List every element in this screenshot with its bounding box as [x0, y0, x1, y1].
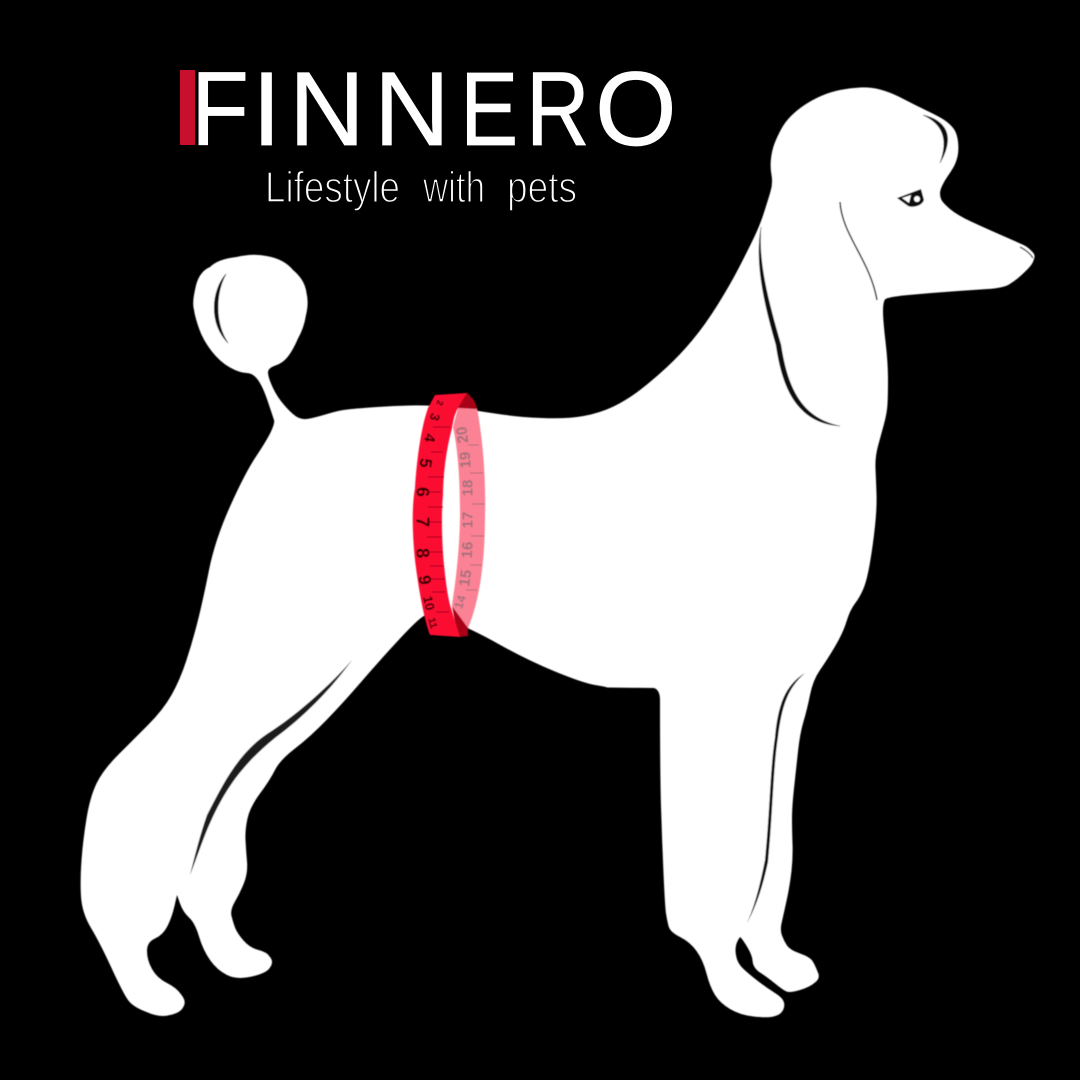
tail crescent line: [214, 274, 228, 343]
rear leg line: [190, 660, 352, 875]
tape back numbers: 19: [457, 451, 475, 469]
tape back ticks: [466, 445, 485, 590]
logo: FINNERO wordmark: N: [289, 51, 365, 168]
tape front numbers: 2: [434, 399, 445, 407]
tagline: Lifestyle: [265, 163, 400, 212]
tape front numbers: [412, 399, 445, 630]
logo: FINNERO wordmark: F: [191, 51, 249, 168]
tape front numbers: 5: [416, 457, 436, 469]
tape front numbers: 7: [413, 517, 433, 527]
poodle silhouette: [81, 87, 1035, 1017]
tape back numbers: 15: [456, 569, 475, 588]
tape back band: [452, 408, 485, 628]
tape front numbers: 9: [414, 574, 435, 586]
tape inner dark ends: [452, 393, 477, 637]
tape front numbers: 6: [413, 487, 433, 497]
measuring tape: [412, 393, 485, 637]
eye: [897, 189, 924, 207]
ear inner line: [840, 202, 877, 300]
tape back numbers: 14: [451, 593, 469, 611]
tape back numbers: [451, 426, 477, 611]
logo: FINNERO wordmark: R: [526, 50, 590, 168]
tape front ticks: [427, 427, 450, 612]
ear outer line: [759, 227, 840, 426]
logo: FINNERO wordmark: E: [460, 51, 518, 168]
logo: FINNERO wordmark: O: [595, 51, 677, 168]
nose line: [1020, 247, 1033, 258]
tape front numbers: 4: [420, 432, 438, 444]
tape back numbers: 16: [459, 541, 477, 559]
tape back numbers: 18: [459, 480, 476, 496]
tape front numbers: 11: [425, 617, 439, 630]
logo: FINNERO wordmark: [180, 50, 677, 168]
logo: FINNERO wordmark: N: [374, 51, 450, 168]
tape front numbers: 10: [420, 594, 438, 612]
body outline: [81, 87, 1035, 1017]
tagline: with: [422, 163, 485, 212]
forehead hair line: [923, 115, 948, 163]
tape front band: [413, 393, 467, 637]
tagline: pets: [507, 163, 577, 212]
tagline: [265, 163, 577, 212]
tape front numbers: 3: [427, 412, 443, 422]
front leg line: [747, 673, 805, 923]
tape front numbers: 8: [412, 547, 433, 559]
tape back numbers: 20: [453, 426, 472, 444]
tape back numbers: 17: [459, 512, 476, 528]
logo: FINNERO wordmark: I: [252, 51, 281, 168]
